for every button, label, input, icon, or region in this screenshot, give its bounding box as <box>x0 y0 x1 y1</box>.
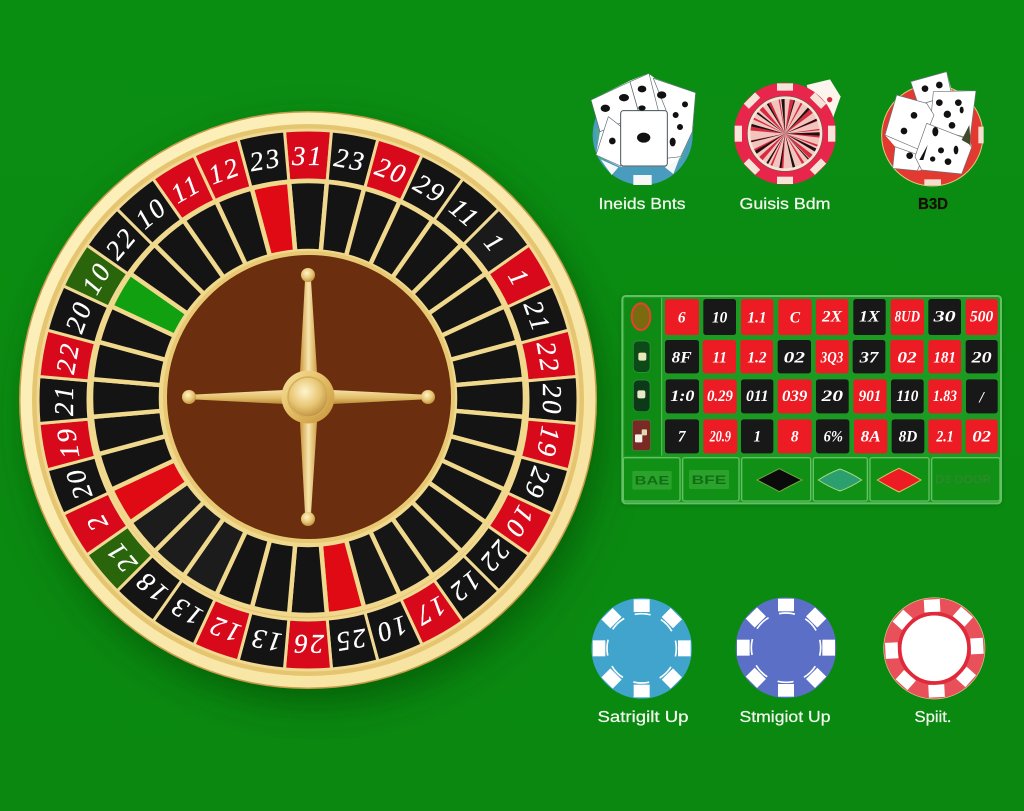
brown wheel centre <box>165 253 453 541</box>
outside bet text boxes: D3 DOOR <box>935 472 992 486</box>
row 4 <box>665 419 998 453</box>
row 1 <box>665 299 998 335</box>
chip: blue <box>591 598 692 699</box>
roulette wheel <box>19 111 597 689</box>
row 3: 901 <box>859 388 881 405</box>
chip: red with white centre <box>883 597 986 700</box>
gold cross turret <box>182 268 435 526</box>
row 2: 02 <box>784 349 805 366</box>
black diamond <box>757 469 802 492</box>
row 3: 011 <box>746 388 769 405</box>
pocket numbers: 11 <box>444 192 486 234</box>
row 4: 8D <box>899 429 917 446</box>
row 1: 8UD <box>895 309 920 326</box>
row 1: C <box>790 309 801 326</box>
pocket numbers: 22 <box>531 339 566 376</box>
row 2: 02 <box>897 349 917 366</box>
row 3: 1:0 <box>670 388 695 405</box>
pocket numbers: 12 <box>204 610 245 649</box>
pocket numbers: 23 <box>332 142 369 177</box>
row 3: 0.29 <box>707 388 733 405</box>
pocket numbers: 22 <box>99 221 143 265</box>
pocket numbers: 13 <box>247 623 284 658</box>
pocket numbers: 1 <box>478 227 512 259</box>
label: dark bet name: B3D <box>918 196 948 213</box>
pocket numbers: 10 <box>498 501 540 543</box>
row 3: 1.83 <box>933 388 957 405</box>
pocket numbers: 31 <box>291 141 324 171</box>
row 4: 7 <box>678 429 687 446</box>
row 2: 11 <box>712 349 727 366</box>
pocket numbers <box>49 141 567 659</box>
pocket numbers: 22 <box>473 535 517 579</box>
row 4: 8 <box>791 429 799 446</box>
icon: red chip with dice cards <box>882 72 984 186</box>
zero column <box>624 298 662 456</box>
central hub <box>282 370 334 424</box>
pocket numbers: 26 <box>292 629 324 659</box>
label: Straight Up 2: Stmigiot Up <box>740 709 831 726</box>
pocket numbers: 25 <box>332 623 369 658</box>
pocket numbers: 12 <box>204 151 245 190</box>
pocket numbers: 13 <box>165 590 207 632</box>
horizontal arm <box>195 390 422 404</box>
outside bet text boxes <box>632 470 992 490</box>
row 4: 1 <box>753 429 761 446</box>
label: Split: Spiit. <box>914 709 952 726</box>
pocket numbers: 21 <box>518 296 557 337</box>
label: Straight Up 1: Satrigilt Up <box>598 709 689 726</box>
row 1: 2X <box>821 309 843 326</box>
row 1: 500 <box>970 309 994 326</box>
row 1: 30 <box>932 309 956 326</box>
red diamond <box>877 468 921 492</box>
pocket numbers: 11 <box>166 168 206 209</box>
pocket numbers: 21 <box>99 535 143 579</box>
row 2: 3Q3 <box>820 349 844 366</box>
row 3: / <box>979 389 986 406</box>
pocket numbers: 2 <box>80 508 114 536</box>
pocket numbers: 10 <box>76 257 118 299</box>
row 4: 20.9 <box>709 429 731 446</box>
table frame <box>622 296 1001 503</box>
pocket numbers: 19 <box>531 424 566 461</box>
pocket numbers: 18 <box>129 565 173 609</box>
chip: indigo <box>736 597 836 698</box>
inner pockets ring <box>90 180 526 616</box>
label: Outside bets: Guisis Bdm <box>740 196 830 213</box>
number pockets ring <box>38 130 578 670</box>
pocket numbers: 23 <box>247 142 284 177</box>
icon: chip with playing cards (teal) <box>591 73 696 185</box>
icon row: bottom chips <box>591 597 986 700</box>
row 2: 20 <box>970 349 992 366</box>
row 4: 8A <box>861 429 881 446</box>
outside bet text boxes: BAE <box>635 474 669 488</box>
outside bet text boxes: BFE <box>692 473 726 487</box>
arm end balls <box>182 268 435 526</box>
pocket numbers: 20 <box>59 296 98 337</box>
row 1: 1.1 <box>747 309 767 326</box>
row 4: 02 <box>972 429 991 446</box>
betting table <box>622 296 1001 503</box>
number grid <box>665 299 998 453</box>
pocket numbers: 10 <box>371 610 412 649</box>
row 2: 8F <box>672 349 692 366</box>
pocket numbers: 1 <box>502 264 536 292</box>
pocket numbers: 12 <box>443 565 487 609</box>
icon row: top bet icons <box>591 72 984 186</box>
pocket numbers: 21 <box>49 384 79 416</box>
pocket numbers: 29 <box>409 168 451 210</box>
pocket numbers: 22 <box>50 339 85 376</box>
pocket numbers: 20 <box>371 151 412 190</box>
vertical arm <box>300 280 317 514</box>
row 3: 20 <box>820 388 843 405</box>
row 2: 37 <box>858 349 880 366</box>
label: Inside bets: Ineids Bnts <box>598 196 686 213</box>
pocket numbers: 10 <box>129 191 173 235</box>
row 3 <box>666 379 998 413</box>
icon: red chip with wheel <box>734 79 841 185</box>
row 2: 181 <box>933 349 956 366</box>
row 1: 10 <box>712 309 728 326</box>
outside bets row <box>623 458 1000 501</box>
row 3: 110 <box>896 388 919 405</box>
row 4: 6% <box>824 429 843 446</box>
pocket numbers: 17 <box>409 590 451 632</box>
pocket numbers: 19 <box>50 424 85 461</box>
pocket numbers: 20 <box>59 463 98 504</box>
wheel outer rim <box>19 111 597 689</box>
row 1: 1X <box>859 309 881 326</box>
row 3: 039 <box>782 388 808 405</box>
row 4: 2.1 <box>935 429 954 446</box>
pocket numbers: 29 <box>518 463 557 504</box>
pocket numbers: 20 <box>537 384 567 416</box>
row 1: 6 <box>678 309 686 326</box>
teal diamond <box>818 469 862 491</box>
row 2: 1.2 <box>747 349 767 366</box>
row 2 <box>665 340 998 373</box>
